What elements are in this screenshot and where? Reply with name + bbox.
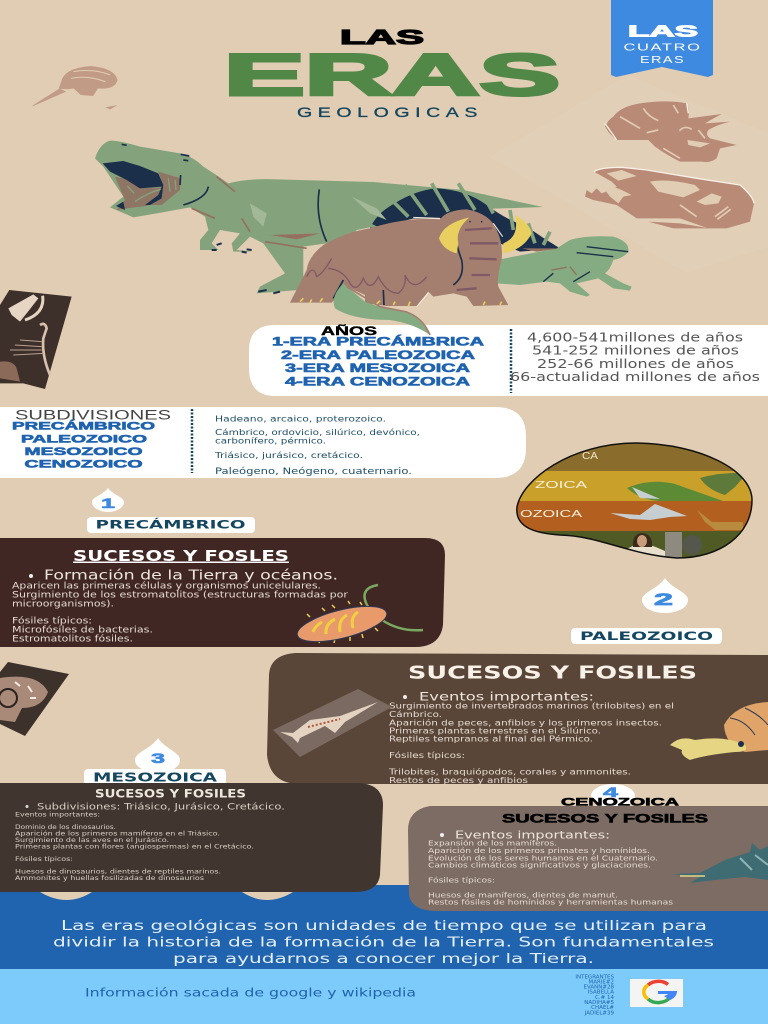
badge: 4 cenozoica: 4	[603, 784, 618, 800]
ribbon: las cuatro eras: ERAS	[640, 55, 685, 66]
panel: mesozoica events and fossils	[0, 783, 383, 892]
dimetrodon	[352, 183, 560, 253]
panel: precambrico events and fossils: Estromatolitos fósiles.	[12, 634, 133, 644]
panel: precambrico events and fossils: Aparicen las primeras células y organismos unicelulares.	[12, 580, 321, 592]
image: geologic eras blob	[510, 440, 760, 561]
panel: paleozoico events and fossils: Restos de peces y anfibios	[389, 776, 528, 785]
badge: 3 mesozoica: 3	[151, 750, 165, 766]
icon: trilobite creature	[294, 585, 423, 649]
card: eras and years: 66-actualidad millones de años	[510, 369, 760, 384]
panel: precambrico events and fossils	[0, 538, 445, 649]
mammoth	[290, 209, 508, 307]
ribbon: las cuatro eras: CUATRO	[624, 42, 702, 54]
panel: mesozoica events and fossils: Ammonites y huellas fosilizadas de dinosaurios	[15, 875, 204, 882]
panel: precambrico events and fossils: SUCESOS Y FOSLES	[73, 547, 289, 565]
card: eras and years: 252-66 millones de años	[537, 356, 734, 371]
card: subdivisions: Triásico, jurásico, cretácico.	[214, 451, 363, 460]
badge: 1 precambrico: PRECÁMBRICO	[96, 516, 246, 532]
panel: mesozoica events and fossils: Eventos importantes:	[15, 812, 100, 818]
icon: ammonite fossil tile	[0, 662, 69, 736]
card: eras and years	[249, 323, 768, 396]
card: subdivisions: Hadeano, arcaico, proterozoico.	[215, 414, 386, 424]
image: geologic eras blob: ZOICA	[535, 480, 588, 491]
card: subdivisions: SUBDIVISIONES	[15, 408, 171, 422]
panel: mesozoica events and fossils: Dominio de los dinosaurios.	[15, 824, 116, 831]
team members list: ISABELLA	[588, 990, 614, 996]
image: geologic eras blob: ICA	[557, 539, 586, 550]
summary text: Las eras geológicas son unidades de tiempo que se utilizan para	[61, 918, 707, 934]
panel: cenozoica events and fossils: Aparición de los primeros primates y homínidos.	[428, 847, 650, 855]
panel: cenozoica events and fossils: Cambios climáticos significativos y glaciaciones.	[428, 862, 651, 870]
icon: ichthyosaur	[672, 843, 768, 883]
card: subdivisions: PRECÁMBRICO	[12, 420, 156, 432]
ribbon: las cuatro eras	[611, 0, 713, 77]
panel: cenozoica events and fossils: Fósiles típicos:	[428, 876, 495, 884]
team members list: JADIEL#39	[584, 1010, 614, 1016]
panel: cenozoica events and fossils: Evolución de los seres humanos en el Cuaternario.	[428, 854, 658, 862]
lizard	[497, 236, 632, 297]
team members list: MARIE#2	[588, 980, 614, 986]
blue band	[0, 885, 768, 969]
card: eras and years: AÑOS	[321, 323, 377, 338]
card: subdivisions	[0, 407, 526, 478]
icon: nautilus	[670, 702, 768, 760]
summary text	[53, 918, 714, 967]
panel: mesozoica events and fossils: Huesos de dinosaurios, dientes de reptiles marinos.	[15, 868, 221, 876]
card: eras and years: 4-ERA CENOZOICA	[285, 374, 471, 388]
summary text: para ayudarnos a conocer mejor la Tierra.	[173, 951, 594, 967]
sand humps under panel	[40, 892, 293, 900]
panel: precambrico events and fossils: Surgimiento de los estromatolitos (estructuras formadas por	[12, 590, 349, 600]
panel: precambrico events and fossils: Microfósiles de bacterias.	[12, 624, 153, 636]
card: subdivisions: Cámbrico, ordovicio, silúrico, devónico,	[215, 428, 420, 437]
card: subdivisions: carbonífero, pérmico.	[215, 436, 326, 446]
illustration: dinosaurs and mammoth	[95, 141, 632, 307]
icon: fish fossil slab	[273, 689, 392, 757]
panel: precambrico events and fossils: Fósiles típicos:	[12, 616, 92, 626]
panel: paleozoico events and fossils	[267, 653, 768, 785]
image: geologic eras blob: OZOICA	[520, 509, 583, 520]
card: eras and years: 3-ERA MESOZOICA	[285, 361, 471, 375]
panel: paleozoico events and fossils: Surgimiento de invertebrados marinos (trilobites) en el	[389, 702, 674, 710]
card: subdivisions: CENOZOICO	[24, 458, 143, 470]
team members list: C.# 14	[595, 995, 614, 1001]
title: ERAS	[224, 43, 560, 108]
panel: mesozoica events and fossils: Primeras plantas con flores (angiospermas) en el Cretácico.	[15, 842, 254, 850]
icon: google logo	[630, 979, 683, 1007]
card: subdivisions: MESOZOICO	[24, 446, 143, 458]
card: eras and years: 1-ERA PRECÁMBRICA	[272, 334, 485, 348]
badge: 2 paleozoico	[571, 578, 722, 644]
card: eras and years: 2-ERA PALEOZOICA	[281, 348, 476, 362]
panel: cenozoica events and fossils: Huesos de mamíferos, dientes de mamut.	[428, 892, 618, 900]
card: subdivisions: PALEOZOICO	[21, 434, 148, 446]
badge: 1 precambrico	[87, 488, 255, 533]
icon: horseshoe crab fossil	[32, 66, 118, 109]
icon: dark fossil tile top	[0, 290, 72, 389]
panel: paleozoico events and fossils: Trilobites, braquiópodos, corales y ammonites.	[388, 766, 631, 776]
footer band	[0, 969, 768, 1024]
image: geologic eras blob: CA	[582, 451, 598, 462]
badge: 2 paleozoico: 2	[654, 590, 673, 609]
icon: t-rex skull fossil	[585, 167, 754, 228]
card: eras and years: 541-252 millones de años	[532, 342, 739, 358]
panel: cenozoica events and fossils	[408, 806, 768, 911]
panel: cenozoica events and fossils: Restos fósiles de homínidos y herramientas humanas	[428, 898, 673, 906]
panel: precambrico events and fossils: microorganismos).	[12, 600, 114, 610]
panel: paleozoico events and fossils: SUCESOS Y FOSILES	[408, 662, 697, 684]
summary text: dividir la historia de la formación de la Tierra. Son fundamentales	[53, 934, 714, 950]
team members list: NADIHA#5	[584, 1000, 614, 1006]
panel: mesozoica events and fossils: Subdivisiones: Triásico, Jurásico, Cretácico.	[37, 802, 285, 812]
panel: paleozoico events and fossils: Aparición de peces, anfibios y los primeros insectos.	[389, 718, 662, 728]
panel: paleozoico events and fossils: Eventos importantes:	[419, 690, 594, 704]
team members list	[575, 974, 615, 1016]
panel: paleozoico events and fossils: Reptiles tempranos al final del Pérmico.	[389, 734, 593, 744]
panel: mesozoica events and fossils: SUCESOS Y FOSILES	[95, 786, 246, 800]
badge: 4 cenozoica: CENOZOICA	[561, 796, 679, 808]
team members list: INTEGRANTES	[575, 974, 615, 980]
panel: paleozoico events and fossils: Primeras plantas terrestres en el Silúrico.	[389, 726, 601, 736]
illustration: reptile tail over card	[334, 283, 430, 335]
t-rex	[95, 141, 543, 293]
card: eras and years: 4,600-541millones de años	[527, 330, 743, 344]
panel: precambrico events and fossils: Formación de la Tierra y océanos.	[44, 568, 338, 584]
panel: mesozoica events and fossils: Surgimiento de las aves en el Jurásico.	[15, 836, 169, 844]
panel: cenozoica events and fossils: SUCESOS Y FOSILES	[502, 812, 708, 826]
badge: 1 precambrico: 1	[101, 495, 115, 511]
badge: 2 paleozoico: PALEOZOICO	[580, 629, 713, 643]
panel: mesozoica events and fossils: Fósiles típicos:	[15, 855, 73, 863]
team members list: CHAEL#	[591, 1005, 614, 1011]
ribbon: las cuatro eras: LAS	[628, 24, 699, 40]
panel: cenozoica events and fossils: Eventos importantes:	[455, 830, 610, 842]
icon: triceratops skull fossil	[605, 101, 737, 162]
badge: 3 mesozoica	[84, 738, 226, 786]
badge: 3 mesozoica: MESOZOICA	[93, 770, 217, 784]
panel: cenozoica events and fossils: Expansión de los mamíferos.	[428, 840, 557, 848]
badge: 4 cenozoica	[561, 784, 679, 808]
panel: paleozoico events and fossils: Fósiles típicos:	[389, 750, 465, 760]
card: subdivisions: Paleógeno, Neógeno, cuaternario.	[215, 466, 412, 477]
title: GEOLOGICAS	[297, 104, 483, 120]
title: LAS	[340, 27, 424, 49]
source note: Información sacada de google y wikipedia	[85, 986, 416, 1000]
title	[224, 27, 560, 120]
team members list: EVANN#28	[584, 984, 614, 990]
panel: paleozoico events and fossils: Cámbrico.	[389, 710, 442, 719]
fossil slab backdrop	[490, 75, 768, 273]
panel: mesozoica events and fossils: Aparición de los primeros mamíferos en el Triásico.	[15, 830, 220, 838]
